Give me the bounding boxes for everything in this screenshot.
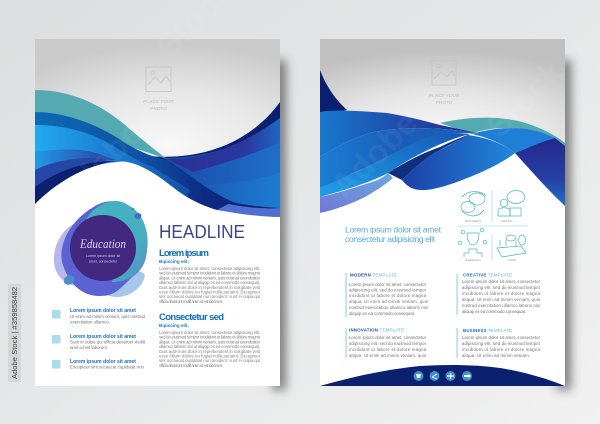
periwinkle tail (320, 173, 393, 213)
paragraph 1: esse cillum dolore eu fugiat nulla pariatur. Excepteur (159, 290, 261, 294)
list: bullets (52, 308, 146, 370)
photo area (320, 39, 565, 146)
mid blue wave (320, 128, 476, 188)
subheading: Bipiscing elit, (159, 259, 189, 264)
text block: innovation template: incididunt ut labore et dolore magna (349, 347, 427, 352)
badge text: Lorem ipsum dolor sit (86, 254, 120, 258)
footer band (320, 365, 565, 386)
watermark: Adobe (324, 104, 425, 206)
icon labels: Department hi (465, 259, 481, 262)
paragraph 2: Duis aute irure dolor in reprehenderit in voluptate velit (159, 349, 261, 354)
dot (64, 275, 74, 285)
text block: innovation template (346, 328, 427, 358)
text block: business template: adipisicing elit, sed do eiusmod tempor (462, 341, 541, 346)
text block: business template: aliqua. Ut enim ad minim veniam. (462, 353, 530, 358)
circle badge (70, 215, 136, 281)
text block: modern template: nostrud exercitation ullamco laboris nisi (349, 305, 428, 310)
placeholder text: PHOTO (150, 106, 167, 111)
intro text (345, 224, 442, 244)
paragraph 1: ullamco laboris nisi ut aliquip ex ea commodo consequat. (159, 280, 260, 285)
right page paper (320, 39, 565, 386)
bullet texts: Ut enim ad minim veniam, quis nostrud (70, 314, 145, 319)
watermark (49, 0, 571, 216)
bullet texts: Excepteur sint occaecat cupidatat non (70, 364, 144, 370)
placeholder text: PHOTO (436, 100, 453, 105)
blob: pale blue (108, 271, 145, 297)
blue upper right (472, 128, 555, 153)
wave: bright blue (35, 125, 190, 197)
icon: photo placeholder (432, 61, 456, 85)
bullet texts: Lorem ipsum dolor sit amet (70, 359, 136, 365)
paragraph 2: aliqua. Ut enim ad minim veniam, quis nostrud exercitation (159, 339, 261, 344)
wave: navy tip (35, 161, 116, 205)
text block: innovation template: aliqua. Ut enim ad minim veniam, quis (349, 353, 426, 358)
icon: arrow (462, 371, 472, 381)
right wave violet (167, 118, 280, 172)
text block: creative template: adipisicing elit, sed do eiusmod tempor (462, 285, 541, 290)
watermark: Adobe (49, 114, 150, 216)
paragraph 2 (159, 330, 261, 368)
navy arc band (150, 102, 280, 218)
paragraph 1: aliqua. Ut enim ad minim veniam, quis nostrud exercitation (159, 275, 261, 280)
paragraph 1: Lorem ipsum dolor sit amet, consectetur adipisicing elit, (159, 266, 260, 271)
wave: dark blue band (35, 112, 243, 210)
paragraph 1: Duis aute irure dolor in reprehenderit in voluptate velit (159, 285, 261, 290)
icon: cart (414, 371, 424, 381)
bullet texts: Lorem ipsum dolor sit amet (70, 334, 136, 340)
placeholder text (143, 100, 174, 110)
text block: business template (456, 328, 541, 358)
wave: teal (35, 90, 167, 159)
white lower body (35, 162, 280, 218)
bullet texts: Lorem ipsum dolor sit amet (70, 308, 136, 314)
text block: modern template: MODERN TEMPLATE (350, 272, 397, 278)
icon: dialogue (461, 192, 486, 216)
text block: creative template: nostrud exercitation ullamco laboris nisi (462, 303, 540, 308)
placeholder text: PLACE YOUR (429, 93, 460, 98)
stock id: Adobe Stock | #359858482 (10, 287, 19, 379)
text block: innovation template: Lorem ipsum dolor sit amet, consectetur (349, 335, 427, 340)
text block: modern template: incididunt ut labore et dolore magna (349, 293, 427, 298)
icon: person with speech (498, 190, 525, 216)
panel: right page (320, 39, 565, 386)
heading: consectetur sed: Consectetur sed (159, 312, 224, 323)
badge text: amet, consectetur (89, 260, 118, 264)
wave: blue curl (35, 158, 112, 187)
text block: creative template: aliquip ex ea commodo consequat. (462, 309, 526, 314)
heading: lorem ipsum: Lorem ipsum (159, 248, 209, 259)
paragraph 2: ullamco laboris nisi ut aliquip ex ea commodo consequat. (159, 344, 260, 349)
text block: modern template: aliquip ex ea commodo consequat. (349, 311, 415, 316)
bullet 3 (52, 360, 60, 368)
right wave blue (165, 118, 280, 208)
paragraph 2: sint occaecat cupidatat non proident, sunt in culpa qui (159, 358, 260, 363)
blob: main violet (61, 201, 136, 296)
wave: upper curl (35, 150, 114, 170)
dot (132, 208, 134, 210)
panel: left page (35, 39, 280, 386)
navy wedge right (515, 138, 565, 206)
paragraph 1 (159, 266, 261, 304)
bullet texts (70, 308, 146, 370)
paragraph 1: sint occaecat cupidatat non proident, sunt in culpa qui (159, 294, 260, 299)
text block: modern template: Lorem ipsum dolor sit amet, consectetur (349, 282, 427, 287)
text block: business template: incididunt ut labore et dolore magna (462, 347, 541, 352)
icon: money (497, 235, 526, 257)
bullet texts: Sunt in culpa qui officia deserunt mollit (70, 340, 146, 344)
icon: photo placeholder (146, 67, 171, 92)
text block: creative template (456, 272, 541, 315)
text block: creative template: incididunt ut labore et dolore magna (462, 291, 541, 296)
icon labels (465, 220, 517, 262)
top blue wave (320, 111, 476, 157)
placeholder text (429, 93, 460, 105)
navy triangle (320, 70, 347, 116)
paragraph 2: officia deserunt mollit anim id est laborum. (159, 363, 223, 368)
text block: innovation template: INNOVATION TEMPLATE (349, 328, 404, 332)
text block: modern template (346, 272, 428, 317)
paragraph 2: sed do eiusmod tempor incididunt ut labore et dolore magna (159, 335, 261, 340)
icon dividers (458, 190, 528, 260)
badge text (86, 254, 120, 263)
badge title: Education (79, 236, 126, 251)
bullet 2 (52, 335, 60, 344)
paragraph 2: Lorem ipsum dolor sit amet, consectetur adipisicing elit, (159, 330, 260, 335)
icon labels: Growth (508, 259, 517, 262)
watermark: Stock (479, 53, 571, 146)
text block: creative template: aliqua. Ut enim ad minim veniam, quis (462, 297, 540, 302)
text block: business template: BUSINESS TEMPLATE (463, 328, 512, 333)
text block: modern template: adipisicing elit, sed do eiusmod tempor (349, 288, 427, 292)
teal band (440, 118, 565, 150)
subheading: Bipiscing elit, (159, 323, 189, 328)
wave: periwinkle tail (217, 204, 280, 217)
intro text: consectetur adipisicing elit (345, 234, 436, 244)
navy sliver (388, 134, 470, 180)
photo area (35, 39, 280, 164)
icon labels: Team form (501, 220, 513, 223)
bullet texts: anim id est laborum. (70, 345, 108, 350)
icons grid (458, 190, 528, 260)
text block: creative template: Lorem ipsum dolor sit amet, consectetur (462, 279, 541, 284)
paragraph 1: officia deserunt mollit anim id est laborum. (159, 299, 223, 304)
stock id (8, 284, 21, 382)
icon labels: Work mobile hi (465, 220, 481, 223)
left page paper (35, 39, 280, 386)
text block: innovation template: adipisicing elit, sed do eiusmod tempor (349, 341, 427, 346)
icon: plane (446, 371, 456, 381)
bullet 1 (52, 310, 60, 318)
icon: share (430, 371, 440, 381)
headline: HEADLINE (159, 222, 245, 242)
bright blue sweep (320, 133, 470, 197)
placeholder text: PLACE YOUR (143, 99, 174, 104)
icon: trophy (458, 228, 487, 257)
text block: modern template: aliqua. Ut enim ad minim veniam, quis (349, 299, 428, 304)
text block: creative template: CREATIVE TEMPLATE (463, 272, 512, 278)
intro text: Lorem ipsum dolor sit amet (345, 224, 442, 234)
footer icons (414, 371, 472, 381)
paragraph 2: esse cillum dolore eu fugiat nulla pariatur. Excepteur (159, 354, 261, 358)
paragraph 1: sed do eiusmod tempor incididunt ut labore et dolore magna (159, 271, 261, 276)
page shadows (272, 60, 571, 390)
right wave lighter band (234, 173, 280, 208)
text block: business template: Lorem ipsum dolor sit amet, consectetur (462, 335, 541, 340)
blob: teal (85, 201, 148, 282)
blue core (402, 135, 515, 190)
dot (134, 213, 142, 219)
blob: education badge (54, 201, 148, 297)
bullet texts: exercitation ullamco. (70, 320, 110, 324)
blob: light lilac (54, 224, 75, 286)
